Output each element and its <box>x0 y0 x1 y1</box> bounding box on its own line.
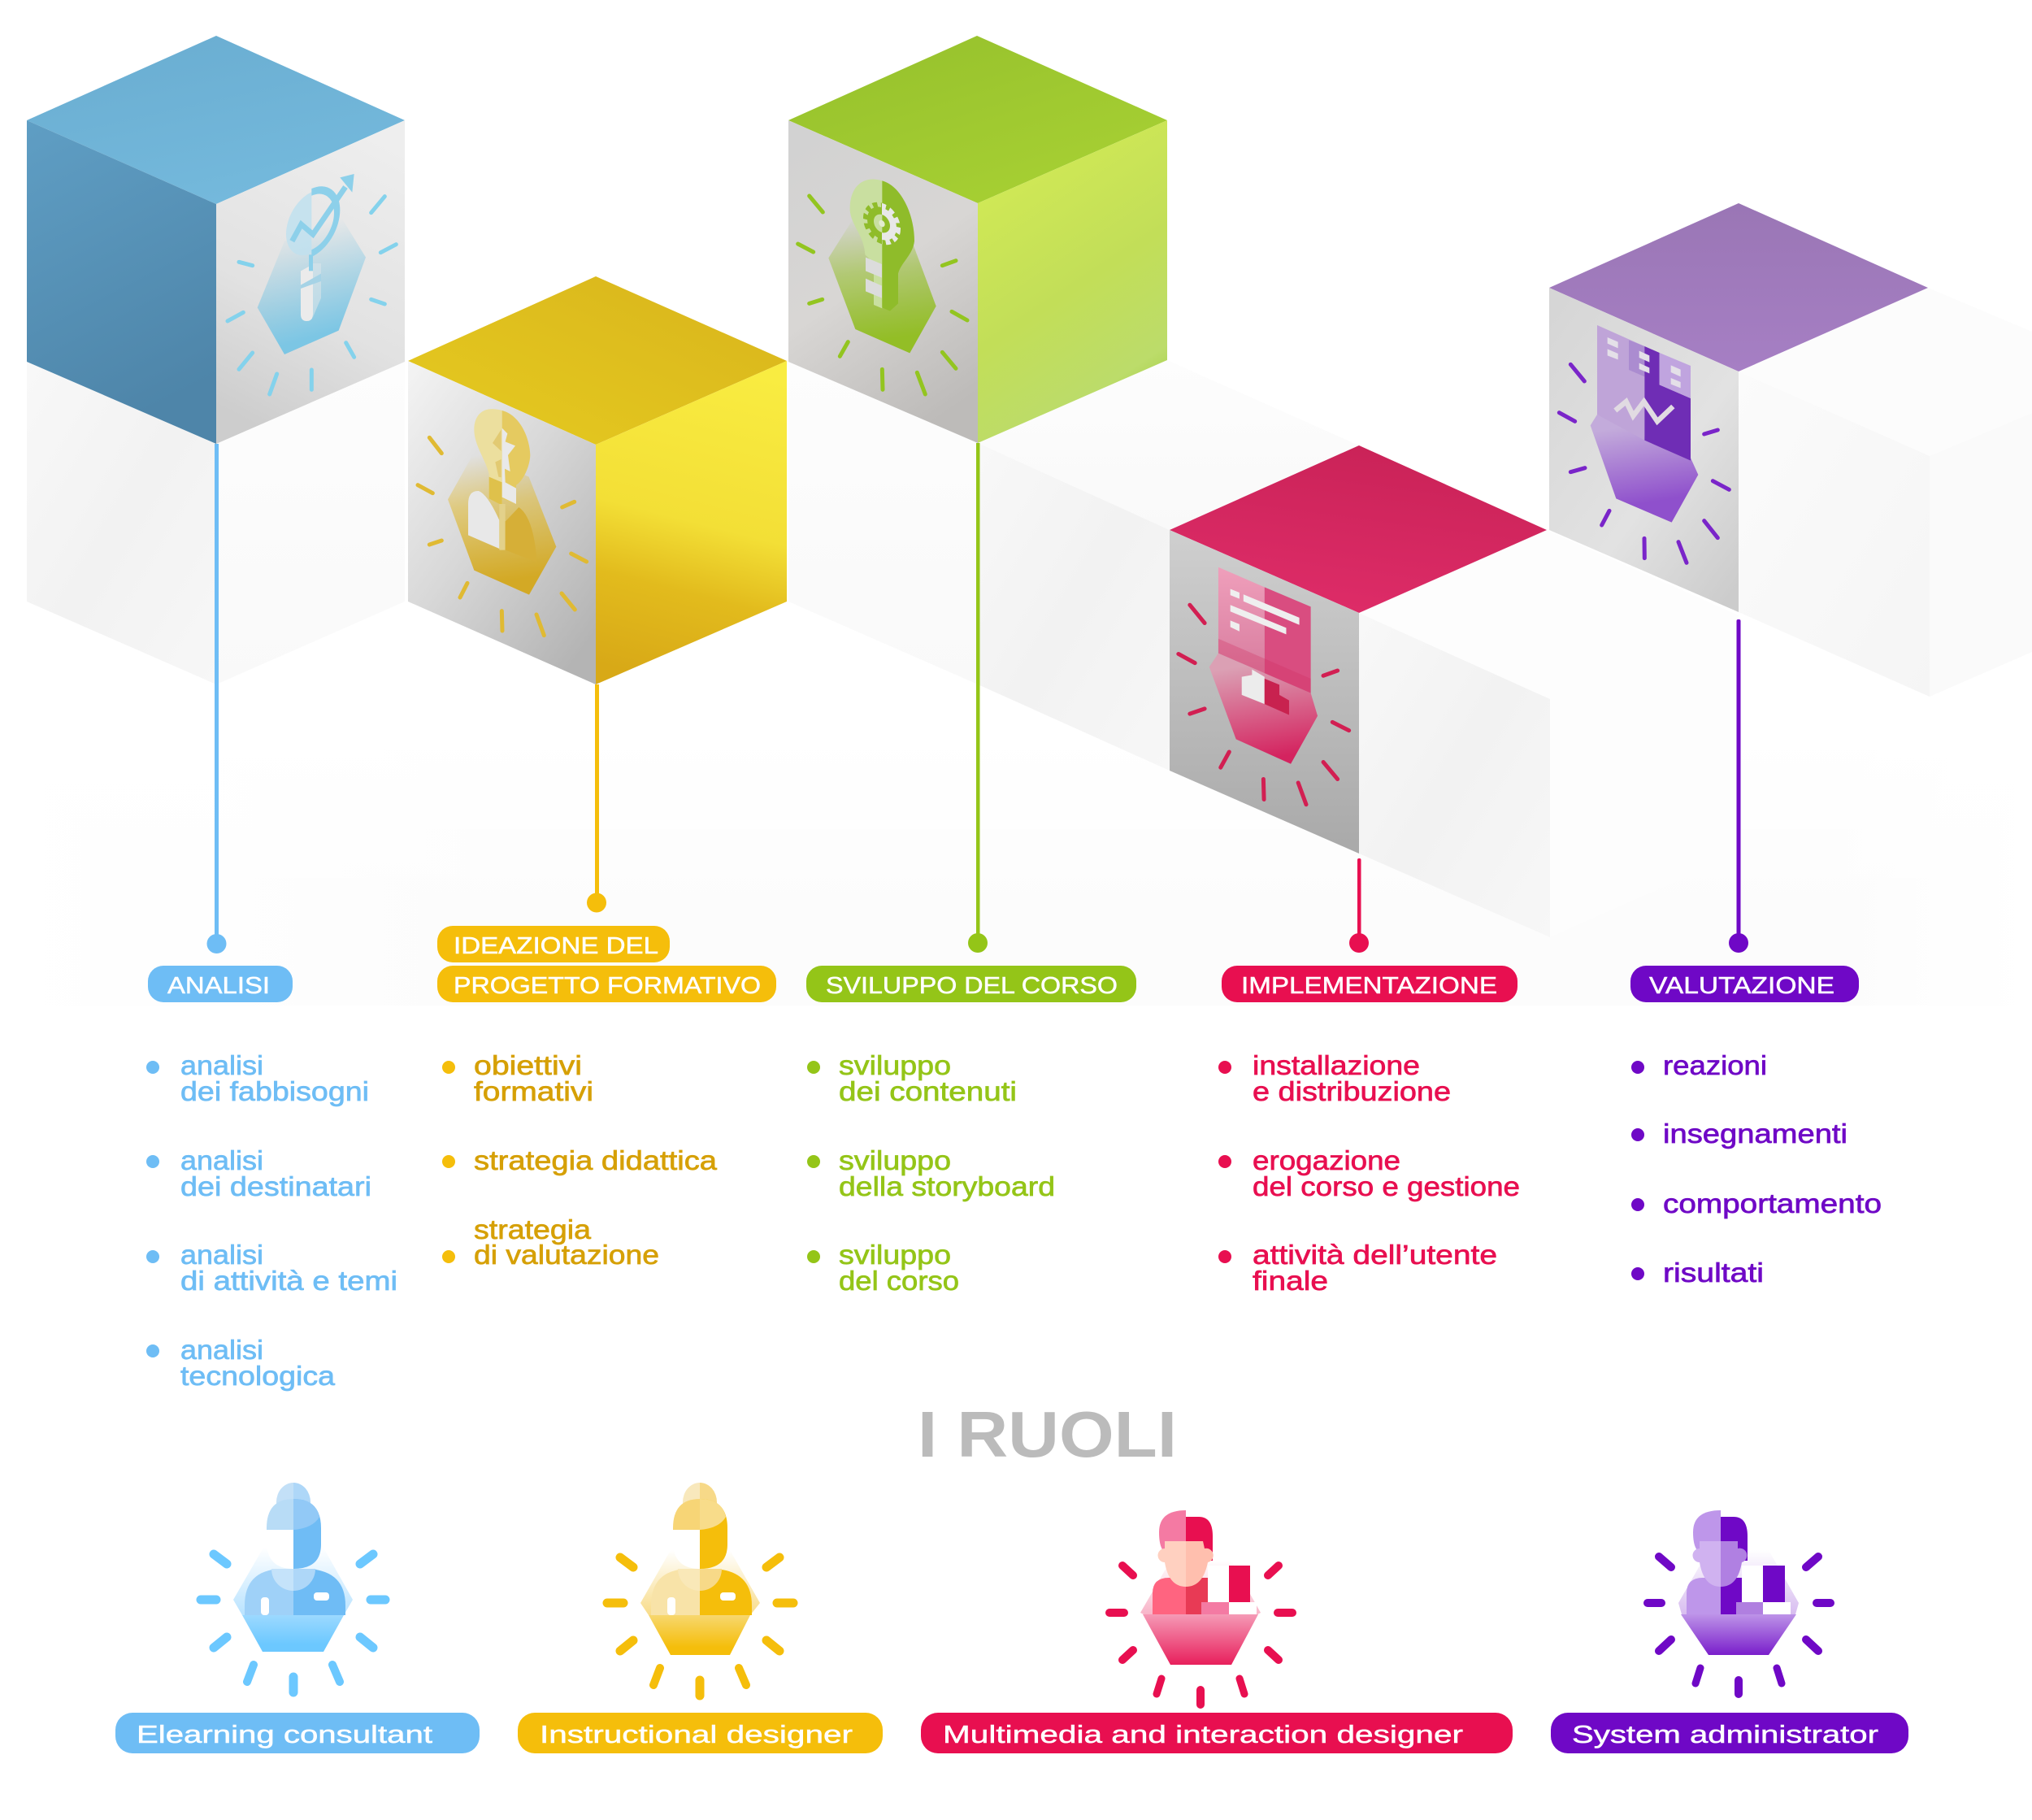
list: ideazione <box>442 1050 718 1270</box>
list: analisi <box>146 1050 397 1391</box>
item: obiettivi formativi <box>442 1050 593 1106</box>
item: attività dell'utente finale: finale <box>1253 1266 1328 1296</box>
role label: elearning consultant <box>115 1713 480 1753</box>
heading: ideazione del progetto formativo <box>437 926 776 1002</box>
heading: valutazione <box>1630 966 1859 1002</box>
item: analisi di attività e temi: analisi <box>180 1240 263 1270</box>
item: obiettivi formativi: obiettivi <box>474 1050 582 1080</box>
heading: valutazione: VALUTAZIONE <box>1649 973 1834 999</box>
item: analisi dei destinatari <box>146 1145 371 1201</box>
item: sviluppo del corso: sviluppo <box>839 1240 951 1270</box>
item: comportamento: comportamento <box>1663 1188 1882 1218</box>
item: sviluppo dei contenuti: dei contenuti <box>839 1076 1017 1106</box>
item: erogazione del corso e gestione: del corso e gestione <box>1253 1171 1520 1201</box>
item: reazioni <box>1631 1050 1767 1080</box>
item: sviluppo dei contenuti <box>807 1050 1017 1106</box>
icon: magnifier with chart <box>228 174 396 394</box>
list: valutazione <box>1631 1050 1882 1288</box>
heading: sviluppo del corso <box>806 966 1136 1002</box>
item: strategia didattica: strategia didattica <box>474 1145 718 1175</box>
item: installazione e distribuzione: e distribuzione <box>1253 1076 1451 1106</box>
item: installazione e distribuzione <box>1218 1050 1451 1106</box>
item: strategia di valutazione <box>442 1214 659 1270</box>
icon: bulb with gear <box>798 179 967 394</box>
item: analisi tecnologica: analisi <box>180 1335 263 1365</box>
icon: document <box>1179 567 1349 805</box>
heading: implementazione: IMPLEMENTAZIONE <box>1241 973 1497 999</box>
heading: analisi <box>148 966 293 1002</box>
item: analisi di attività e temi <box>146 1240 397 1296</box>
item: sviluppo della storyboard: della storyboard <box>839 1171 1055 1201</box>
background haze <box>0 732 2032 1006</box>
connector: ideazione <box>587 684 606 912</box>
item: analisi dei fabbisogni: dei fabbisogni <box>180 1076 369 1106</box>
item: analisi di attività e temi: di attività e temi <box>180 1266 397 1296</box>
item: sviluppo della storyboard: sviluppo <box>839 1145 951 1175</box>
cube: implementazione <box>1170 445 1547 854</box>
item: sviluppo del corso: del corso <box>839 1266 959 1296</box>
item: risultati: risultati <box>1663 1257 1764 1288</box>
item: analisi dei fabbisogni <box>146 1050 369 1106</box>
cube: ideazione <box>408 276 787 684</box>
item: analisi dei destinatari: dei destinatari <box>180 1171 371 1201</box>
cube: valutazione <box>1549 203 1928 612</box>
role label: instructional designer: Instructional designer <box>540 1720 853 1748</box>
item: erogazione del corso e gestione <box>1218 1145 1520 1201</box>
item: insegnamenti: insegnamenti <box>1663 1118 1847 1149</box>
item: sviluppo della storyboard <box>807 1145 1055 1201</box>
connector: implementazione <box>1349 858 1369 953</box>
item: installazione e distribuzione: installazione <box>1253 1050 1420 1080</box>
icon: results chart <box>1559 325 1729 563</box>
heading: analisi: ANALISI <box>167 973 270 999</box>
role label: instructional designer <box>518 1713 883 1753</box>
item: attività dell'utente finale: attività dell’utente <box>1253 1240 1497 1270</box>
item: analisi tecnologica <box>146 1335 336 1391</box>
cube: analisi <box>27 36 405 444</box>
item: reazioni: reazioni <box>1663 1050 1767 1080</box>
cube: sviluppo <box>788 36 1167 443</box>
item: analisi dei fabbisogni: analisi <box>180 1050 263 1080</box>
role label: multimedia and interaction designer: Multimedia and interaction designer <box>943 1720 1463 1748</box>
title: i ruoli: I RUOLI <box>918 1398 1177 1470</box>
role icon: multimedia and interaction designer <box>1109 1510 1292 1705</box>
role label: elearning consultant: Elearning consultant <box>137 1720 432 1748</box>
role label: system administrator: System administrator <box>1572 1720 1878 1748</box>
list: sviluppo <box>807 1050 1055 1296</box>
item: erogazione del corso e gestione: erogazione <box>1253 1145 1400 1175</box>
item: sviluppo del corso <box>807 1240 959 1296</box>
heading: ideazione del progetto formativo: PROGETTO FORMATIVO <box>454 973 761 999</box>
role label: multimedia and interaction designer <box>921 1713 1513 1753</box>
heading: implementazione <box>1222 966 1517 1002</box>
heading: sviluppo del corso: SVILUPPO DEL CORSO <box>826 973 1118 999</box>
list: implementazione <box>1218 1050 1520 1296</box>
role icon: elearning consultant <box>201 1483 385 1692</box>
connector: sviluppo <box>968 443 988 953</box>
item: strategia di valutazione: di valutazione <box>474 1240 659 1270</box>
connector: analisi <box>206 444 226 953</box>
item: analisi tecnologica: tecnologica <box>180 1361 336 1391</box>
item: strategia di valutazione: strategia <box>474 1214 592 1244</box>
item: attività dell'utente finale <box>1218 1240 1497 1296</box>
icon: person with idea <box>418 409 587 636</box>
item: analisi dei destinatari: analisi <box>180 1145 263 1175</box>
role icon: system administrator <box>1648 1510 1830 1694</box>
connector: valutazione <box>1729 619 1748 953</box>
item: risultati <box>1631 1257 1764 1288</box>
item: obiettivi formativi: formativi <box>474 1076 593 1106</box>
role label: system administrator <box>1551 1713 1908 1753</box>
heading: ideazione del progetto formativo: IDEAZIONE DEL <box>454 933 658 959</box>
item: sviluppo dei contenuti: sviluppo <box>839 1050 951 1080</box>
role icon: instructional designer <box>607 1483 793 1696</box>
ghost blocks <box>27 288 2032 937</box>
